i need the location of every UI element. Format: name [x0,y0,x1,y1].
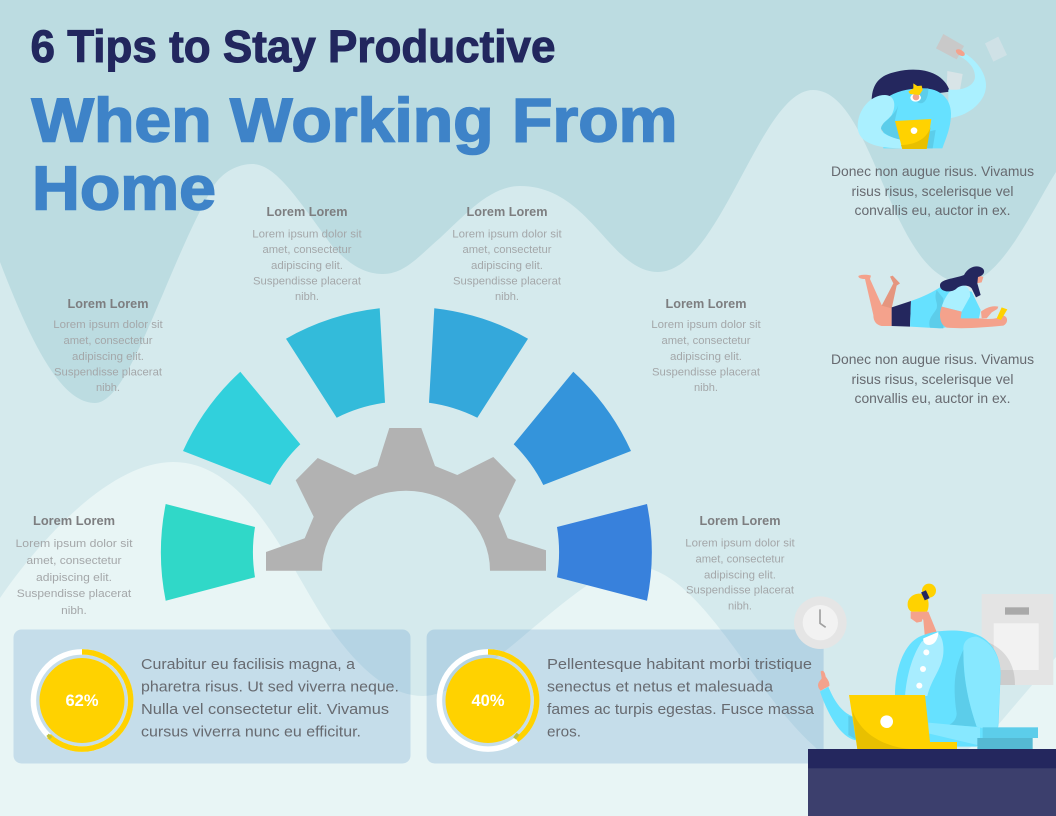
panel: 40% stat [427,630,824,764]
text: middle right caption: convallis eu, auctor in ex. [854,391,1010,406]
segment 3 [286,308,385,418]
tip label: top right: Suspendisse placerat [453,276,562,288]
tip label: right bottom: Suspendisse placerat [686,585,795,597]
panel text: Nulla vel consectetur elit. Vivamus [141,701,389,718]
panel text [547,656,815,741]
text: top right caption: Donec non augue risus. Vivamus [831,164,1034,179]
segment 1 [161,504,255,601]
segment 6 [557,504,652,601]
background: bottom wave layer [0,462,1056,816]
heading: When Working From Home: When Working From [32,87,678,156]
gear icon [266,428,546,571]
wall board [982,594,1053,685]
text: middle right caption: risus risus, scelerisque vel [852,372,1014,387]
tip label: top left [252,205,363,303]
illustration: person with laptop and papers [858,34,1007,149]
text: top right caption [831,164,1034,218]
panel text: cursus viverra nunc eu efficitur. [141,724,361,741]
heading: When Working From Home [32,87,678,223]
desk [808,749,1056,816]
tip label: top left: nibh. [295,291,319,303]
donut chart: 40% [439,652,537,749]
tip label: top right: adipiscing elit. [471,260,543,272]
tip label: left middle: amet, consectetur [64,335,153,347]
tip label: left middle: Lorem ipsum dolor sit [53,319,164,331]
tip label: right middle: nibh. [694,382,718,394]
illustration: woman at desk [794,584,1053,749]
segment 5 [514,372,631,485]
text: middle right caption: Donec non augue risus. Vivamus [831,352,1034,367]
tip label: left middle: Suspendisse placerat [54,366,163,378]
tip label: right bottom: amet, consectetur [696,554,785,566]
text: top right caption: convallis eu, auctor in ex. [854,203,1010,218]
tip label: top left: amet, consectetur [262,244,352,256]
panel text: Pellentesque habitant morbi tristique [547,656,812,673]
panel text: senectus et netus et malesuada [547,679,774,696]
tip label: top left: Lorem Lorem [266,205,348,219]
tip label: top left: Lorem ipsum dolor sit [252,228,363,240]
panel text [141,656,399,741]
tip label: left middle [53,297,164,394]
books [977,727,1038,749]
tip label: top right [452,205,563,303]
tip label: left middle: nibh. [96,382,120,394]
woman figure [818,584,1001,747]
tip label: left bottom: amet, consectetur [26,555,122,567]
tip label: left bottom: adipiscing elit. [36,572,112,584]
text: top right caption: risus risus, scelerisque vel [852,184,1014,199]
tip label: left middle: adipiscing elit. [72,351,144,363]
tip label: left bottom: nibh. [61,605,87,617]
tip label: right bottom [685,514,796,612]
tip label: left bottom: Lorem ipsum dolor sit [16,538,133,550]
gear diagram [161,308,652,601]
panel text: fames ac turpis egestas. Fusce massa [547,701,815,718]
segment 2 [183,372,300,485]
panel: 62% stat [14,630,410,764]
tip label: right bottom: Lorem ipsum dolor sit [685,538,796,550]
tip label: top left: adipiscing elit. [271,260,343,272]
tip label: right middle: Suspendisse placerat [652,366,761,378]
panel text: eros. [547,724,581,741]
illustration: woman lying with phone [858,266,1007,328]
donut chart: 62% [33,652,131,749]
tip label: right middle: Lorem ipsum dolor sit [651,319,762,331]
donut chart: 62%: 62% [66,692,99,710]
tip label: right bottom: nibh. [728,600,752,612]
panel text: pharetra risus. Ut sed viverra neque. [141,679,399,696]
tip label: top right: Lorem Lorem [466,205,548,219]
title: 6 Tips to Stay Productive: 6 Tips to Stay Productive [30,21,556,72]
tip label: top right: Lorem ipsum dolor sit [452,228,563,240]
tip label: left middle: Lorem Lorem [68,297,148,311]
donut chart: 40%: 40% [472,692,505,710]
laptop [849,695,957,749]
tip label: top right: amet, consectetur [462,244,552,256]
tip label: left bottom: Lorem Lorem [33,514,115,528]
text: middle right caption [831,352,1034,406]
tip label: left bottom: Suspendisse placerat [17,588,132,600]
icon: clock [794,596,847,649]
heading: When Working From Home: Home [32,154,216,223]
tip label: right bottom: Lorem Lorem [700,514,780,528]
tip label: right bottom: adipiscing elit. [704,570,776,582]
tip label: top right: nibh. [495,291,519,303]
tip label: right middle: Lorem Lorem [666,297,746,311]
tip label: top left: Suspendisse placerat [253,276,362,288]
tip label: left bottom [16,514,133,617]
segment 4 [429,308,528,418]
tip label: right middle [651,297,762,394]
panel text: Curabitur eu facilisis magna, a [141,656,356,673]
tip label: right middle: amet, consectetur [662,335,751,347]
tip label: right middle: adipiscing elit. [670,351,742,363]
